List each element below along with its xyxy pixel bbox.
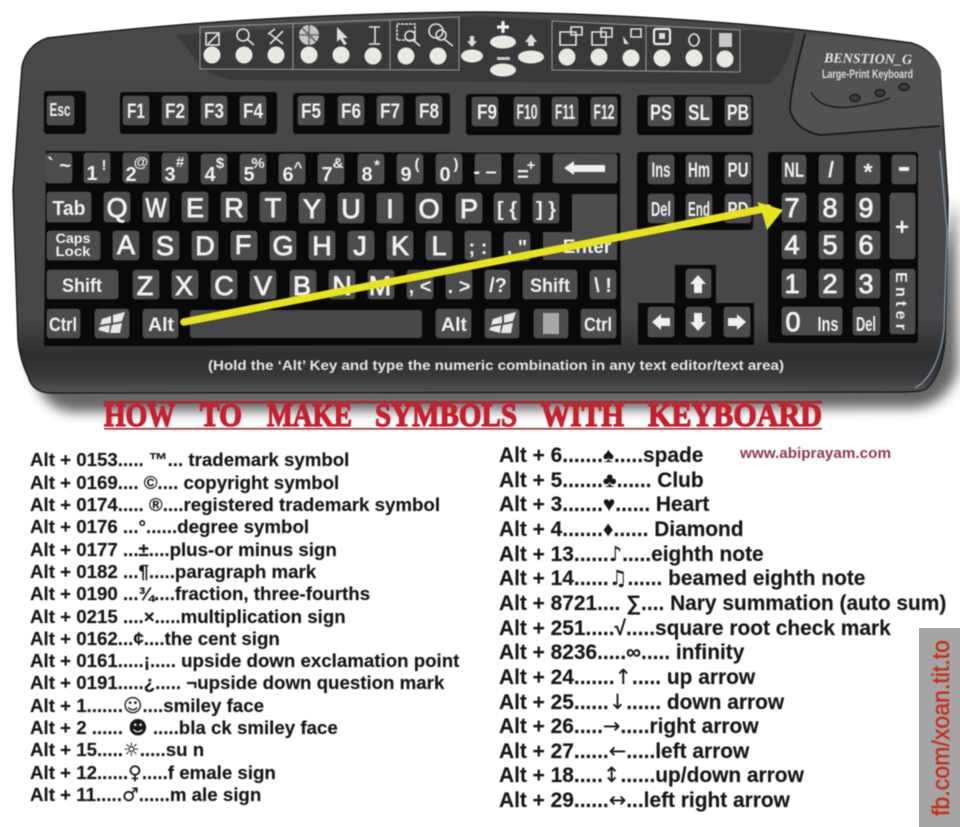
caps-lock key row: , " <box>507 237 527 259</box>
number key row: 5 <box>243 164 255 186</box>
numeric keypad: 3 <box>858 269 874 299</box>
right symbol list: Alt + 18.....↕......up/down arrow <box>499 763 805 787</box>
function key row: F12 <box>594 101 614 124</box>
navigation key block: PU <box>728 159 748 182</box>
shift key row: B <box>293 271 311 301</box>
icon: tools <box>268 29 283 44</box>
heading: how to make symbols with keyboard: WITH <box>541 398 624 434</box>
numeric keypad: 8 <box>822 193 838 223</box>
numeric keypad: + <box>895 214 909 241</box>
main key block <box>44 151 621 346</box>
caps-lock key row: H <box>312 231 332 261</box>
numeric keypad: / <box>828 157 834 182</box>
left symbol list <box>30 449 459 806</box>
product label: Large-Print Keyboard <box>822 69 913 81</box>
function key row: SL <box>688 100 710 125</box>
number key row: 7 <box>321 164 333 186</box>
right symbol list: Alt + 6.......♠.....spade <box>499 444 703 467</box>
icon: folder chat <box>560 27 582 45</box>
numeric keypad: Del <box>856 314 876 336</box>
icon: mouse <box>689 34 699 46</box>
numeric keypad: 0 <box>785 307 801 337</box>
function key row: F11 <box>555 101 575 124</box>
navigation key block <box>637 152 753 230</box>
function key row: Esc <box>50 100 70 120</box>
number key row: 3 <box>164 164 176 186</box>
QWERTY key row: [ { <box>497 199 517 221</box>
caps-lock key row: D <box>195 231 215 261</box>
QWERTY key row: P <box>460 194 478 224</box>
icon: page chat <box>592 28 612 45</box>
QWERTY key row: E <box>186 193 204 223</box>
right symbol list: Alt + 24.......↑..... up arrow <box>499 665 756 689</box>
icon: menu key <box>543 313 559 334</box>
caps-lock key row: F <box>235 230 251 260</box>
icon: zoom disc <box>429 24 443 38</box>
numeric keypad: 7 <box>784 193 800 223</box>
icon: windows logo <box>98 312 125 333</box>
numeric keypad: 4 <box>784 230 800 260</box>
icon: windows logo right <box>489 312 516 333</box>
left symbol list: Alt + 11.....♂......m ale sign <box>30 784 261 806</box>
top shelf <box>176 16 795 84</box>
arrow key cluster <box>638 265 754 345</box>
right symbol list: Alt + 8236.....∞..... infinity <box>499 641 745 664</box>
QWERTY key row: ] } <box>536 199 556 221</box>
QWERTY key row: W <box>146 193 167 223</box>
right symbol list: Alt + 251.....√.....square root check mark <box>499 617 891 640</box>
number key row: ^ <box>294 159 303 176</box>
shift key row: . > <box>448 276 470 298</box>
function key row: F3 <box>204 100 224 123</box>
icon: pointer chat <box>631 29 641 37</box>
heading: how to make symbols with keyboard: TO <box>200 398 242 434</box>
bottom modifier key row <box>47 309 616 338</box>
right symbol list: Alt + 3.......♥...... Heart <box>499 493 709 516</box>
left symbol list: Alt + 0162...¢....the cent sign <box>30 628 280 649</box>
icon: backspace arrow <box>564 161 605 175</box>
left symbol list: Alt + 0182 ...¶.....paragraph mark <box>30 561 317 582</box>
number key row: 2 <box>125 164 137 186</box>
right symbol list: Alt + 4.......♦...... Diamond <box>499 518 744 541</box>
heading: how to make symbols with keyboard: KEYBOARD <box>648 398 822 434</box>
left symbol list: Alt + 0174..... ®....registered trademark symbol <box>30 494 440 515</box>
caps-lock key row: Enter <box>563 237 612 258</box>
shift key row: C <box>214 271 234 301</box>
icon: zoom area <box>397 24 415 40</box>
QWERTY key row: U <box>341 194 361 224</box>
shift key row: , < <box>409 276 431 298</box>
right symbol list: Alt + 13......♪.....eighth note <box>499 542 764 566</box>
shift key row: Z <box>137 271 153 301</box>
function key row: F6 <box>341 100 361 123</box>
caps-lock key row: S <box>156 231 174 261</box>
left symbol list: Alt + 0177 ...±....plus-or minus sign <box>30 539 337 560</box>
icon: magnifier <box>237 29 249 41</box>
right symbol list <box>499 444 946 812</box>
number key row: 9 <box>400 164 412 186</box>
numeric keypad: 2 <box>822 269 838 299</box>
caps-lock key row: J <box>353 231 367 261</box>
bottom modifier key row: Ctrl <box>584 315 612 336</box>
right symbol list: Alt + 8721.... ∑.... Nary summation (auto sum) <box>499 592 946 615</box>
shift key row: Shift <box>62 276 103 297</box>
numeric keypad: Ins <box>818 314 838 336</box>
vertical watermark <box>919 628 960 827</box>
QWERTY key row <box>47 192 559 224</box>
numeric keypad <box>768 152 918 343</box>
right symbol list: Alt + 27......←.....left arrow <box>499 739 750 763</box>
left symbol list: Alt + 1.......☺....smiley face <box>30 695 264 717</box>
function key row: F10 <box>516 101 538 124</box>
bottom modifier key row: Alt <box>148 315 175 336</box>
heading: how to make symbols with keyboard: SYMBOLS <box>375 398 517 434</box>
left symbol list: Alt + 0215 ....×.....multiplication sign <box>30 606 346 627</box>
numeric keypad: NL <box>784 159 804 182</box>
function key row: F4 <box>243 100 263 123</box>
right symbol list: Alt + 5.......♣...... Club <box>499 469 704 492</box>
number key row <box>46 153 617 186</box>
numeric keypad: 9 <box>858 193 874 223</box>
heading: how to make symbols with keyboard: HOW <box>104 398 175 434</box>
shift key row <box>47 270 616 301</box>
shift key row: Shift <box>530 276 571 297</box>
left symbol list: Alt + 0190 ...¾....fraction, three-fourths <box>30 583 370 604</box>
number key row: ) <box>454 156 458 173</box>
right symbol list: Alt + 14......♫...... beamed eighth note <box>499 566 865 590</box>
function key row: PB <box>727 100 749 125</box>
shift key row: /? <box>489 275 507 297</box>
caps-lock key row: Lock <box>56 243 91 259</box>
number key row: @ <box>134 154 148 171</box>
brand and LED panel <box>790 34 943 135</box>
left symbol list: Alt + 0191.....¿..... ¬upside down question mark <box>30 672 445 693</box>
right-side blue edge highlight <box>915 150 947 388</box>
function key row: F8 <box>419 100 439 123</box>
yellow arrow from Alt to numpad <box>184 202 783 322</box>
caps-lock key row: G <box>272 231 294 261</box>
numeric keypad: Enter <box>892 272 909 330</box>
left symbol list: Alt + 15.....☼.....su n <box>30 739 204 761</box>
icon: lock square <box>654 29 670 44</box>
function key row: F1 <box>127 100 145 123</box>
caps-lock key row: ; : <box>469 237 487 259</box>
directional zoom buttons <box>461 21 544 76</box>
caps-lock key row: L <box>431 231 447 261</box>
QWERTY key row: Q <box>106 193 128 223</box>
left symbol list: Alt + 0169.... ©.... copyright symbol <box>30 472 339 493</box>
navigation key block: PD <box>728 199 748 221</box>
instruction caption: (Hold the ‘Alt’ Key and type the numeric combination in any text editor/text area) <box>208 358 784 373</box>
left symbol list: Alt + 0153..... ™... trademark symbol <box>30 449 349 470</box>
caps-lock key row <box>47 194 617 261</box>
heading: how to make symbols with keyboard: MAKE <box>267 398 352 434</box>
function key row: F9 <box>477 101 497 124</box>
QWERTY key row: Tab <box>52 198 86 220</box>
numeric keypad: 6 <box>858 230 874 260</box>
icon: disc <box>299 25 319 45</box>
left symbol list: Alt + 2 ...... ☻ .....bla ck smiley face <box>30 717 338 739</box>
function key row: F7 <box>380 100 400 123</box>
icon: note <box>206 33 219 45</box>
caps-lock key row: Caps <box>56 230 91 246</box>
caps-lock key row: K <box>391 231 409 261</box>
number key row: ` ~ <box>47 155 71 177</box>
navigation key block: Ins <box>652 159 670 182</box>
number key row: $ <box>216 155 225 172</box>
numeric keypad: 5 <box>822 230 838 260</box>
numeric keypad: 1 <box>784 269 800 299</box>
number key row: - – <box>473 161 497 183</box>
QWERTY key row: O <box>418 194 440 224</box>
left symbol list: Alt + 0176 ...°......degree symbol <box>30 516 309 537</box>
shift key row: \ ! <box>594 275 612 297</box>
navigation key block: Hm <box>688 159 710 182</box>
number key row: # <box>176 154 185 171</box>
bottom modifier key row: Alt <box>441 315 468 336</box>
keyboard illustration <box>13 12 948 393</box>
left symbol list: Alt + 12......♀.....f emale sign <box>30 762 276 784</box>
number key row: 8 <box>361 164 373 186</box>
shift key row: M <box>369 271 391 301</box>
number key row: % <box>251 155 265 172</box>
shift key row: N <box>332 271 352 301</box>
left hot-key panel <box>200 17 459 70</box>
number key row: = <box>517 164 529 186</box>
number key row: 4 <box>204 164 216 186</box>
number key row: + <box>527 157 536 174</box>
function key row: F5 <box>301 100 321 123</box>
keyboard body <box>13 12 948 393</box>
enter key <box>543 194 617 260</box>
QWERTY key row: I <box>386 194 394 224</box>
right symbol list: Alt + 26.....→.....right arrow <box>499 714 759 738</box>
indicator lights <box>811 92 890 107</box>
icon: text cursor <box>369 27 380 44</box>
vertical watermark: fb.com/xoan.tit.to <box>928 640 955 816</box>
number key row: 1 <box>86 163 98 185</box>
shift key row: V <box>254 271 272 301</box>
icon: document person <box>719 33 732 47</box>
website credit: www.abiprayam.com <box>739 446 891 462</box>
shift key row: X <box>175 271 193 301</box>
icon: pointer <box>337 27 348 45</box>
right hot-key panel <box>552 21 740 72</box>
QWERTY key row: T <box>265 193 281 223</box>
numeric keypad: * <box>863 159 873 186</box>
number key row: ( <box>414 156 420 173</box>
QWERTY key row: R <box>224 193 244 223</box>
brand name: BENSTION_G <box>823 51 912 68</box>
left symbol list: Alt + 0161.....¡..... upside down exclamation point <box>30 650 459 671</box>
caps-lock key row: A <box>117 230 135 260</box>
navigation key block: End <box>688 199 710 221</box>
number key row: ! <box>102 157 106 174</box>
QWERTY key row: Y <box>303 194 321 224</box>
function key row <box>44 91 753 135</box>
function key row: PS <box>650 100 672 125</box>
bottom modifier key row: Ctrl <box>49 315 77 336</box>
keyboard shadow <box>30 200 958 412</box>
right symbol list: Alt + 25......↓...... down arrow <box>499 690 785 714</box>
heading: how to make symbols with keyboard <box>104 398 822 434</box>
function key row: F2 <box>165 100 185 123</box>
navigation key block: Del <box>651 199 671 221</box>
number key row: 6 <box>282 164 294 186</box>
number key row: & <box>333 155 344 172</box>
right symbol list: Alt + 29......↔...left right arrow <box>499 788 791 812</box>
number key row: 0 <box>439 164 451 186</box>
number key row: * <box>374 157 380 174</box>
